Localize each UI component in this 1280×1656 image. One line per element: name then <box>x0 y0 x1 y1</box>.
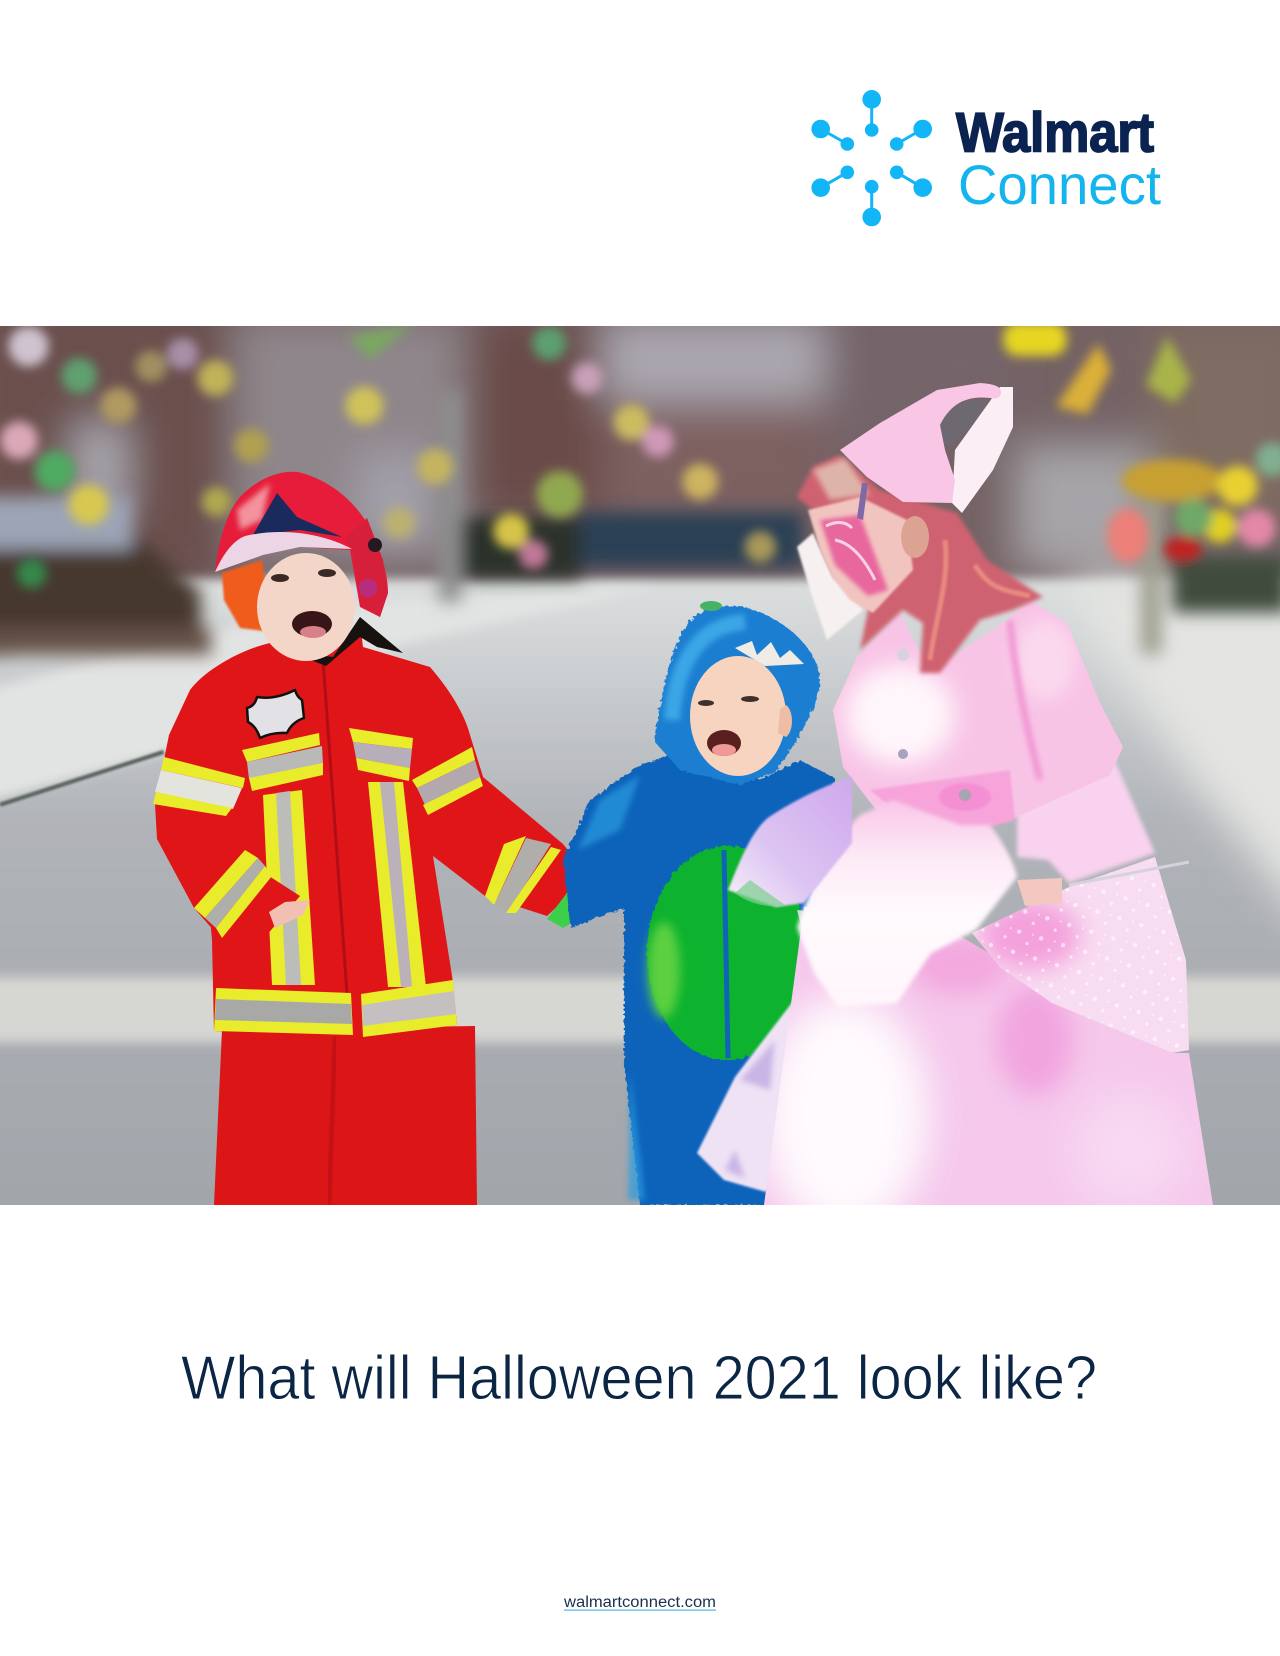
lower skirt <box>764 906 1213 1205</box>
hair clip <box>857 483 868 520</box>
hat <box>840 383 1013 513</box>
white overskirt <box>797 800 1017 1007</box>
glove <box>547 893 570 928</box>
photo: three children in Halloween costumes <box>0 296 1280 1235</box>
hood <box>654 606 820 785</box>
title: What will Halloween 2021 look like? <box>181 1343 1097 1413</box>
hood teeth <box>735 641 804 666</box>
sleeve stripes <box>153 747 561 938</box>
wordmark: Walmart: Walmart <box>956 100 1154 164</box>
silver panel <box>797 910 816 974</box>
far sleeve <box>1017 745 1155 883</box>
street background <box>0 296 1280 1223</box>
helmet <box>215 472 388 617</box>
sparkle overskirt <box>972 857 1189 1053</box>
sleeve: far arm <box>430 667 568 916</box>
wordmark: Connect: Connect <box>958 153 1161 216</box>
hand <box>269 900 310 928</box>
face <box>690 656 786 776</box>
hair <box>222 560 272 632</box>
sleeve: near arm <box>155 690 300 956</box>
sidewalks and crossing <box>0 576 1280 1042</box>
bokeh lights <box>0 322 1280 588</box>
jacket body <box>190 623 490 1037</box>
face <box>257 553 355 661</box>
hand and wand <box>1017 878 1062 906</box>
badge <box>247 690 304 738</box>
neck strap <box>253 617 403 666</box>
footer link: walmartconnect.com <box>563 1594 716 1611</box>
trousers <box>214 1026 477 1205</box>
sash and flower <box>870 770 1016 828</box>
child: firefighter <box>153 472 600 1205</box>
fleece suit <box>563 745 835 1205</box>
veil <box>797 533 863 640</box>
flower <box>939 783 991 811</box>
left ruffle <box>696 1000 792 1194</box>
hair <box>797 455 1043 673</box>
child: blue monster <box>563 601 835 1205</box>
dark shrubs <box>0 391 1280 657</box>
child: pink princess <box>697 383 1220 1235</box>
logo: Walmart Connect <box>811 90 1161 226</box>
icon: spark network <box>811 90 932 226</box>
upper bodice <box>830 600 1130 830</box>
painted face <box>808 497 913 613</box>
lilac sheer sleeve <box>728 777 852 907</box>
belly patch <box>647 846 807 1060</box>
chest stripes <box>214 728 457 1037</box>
